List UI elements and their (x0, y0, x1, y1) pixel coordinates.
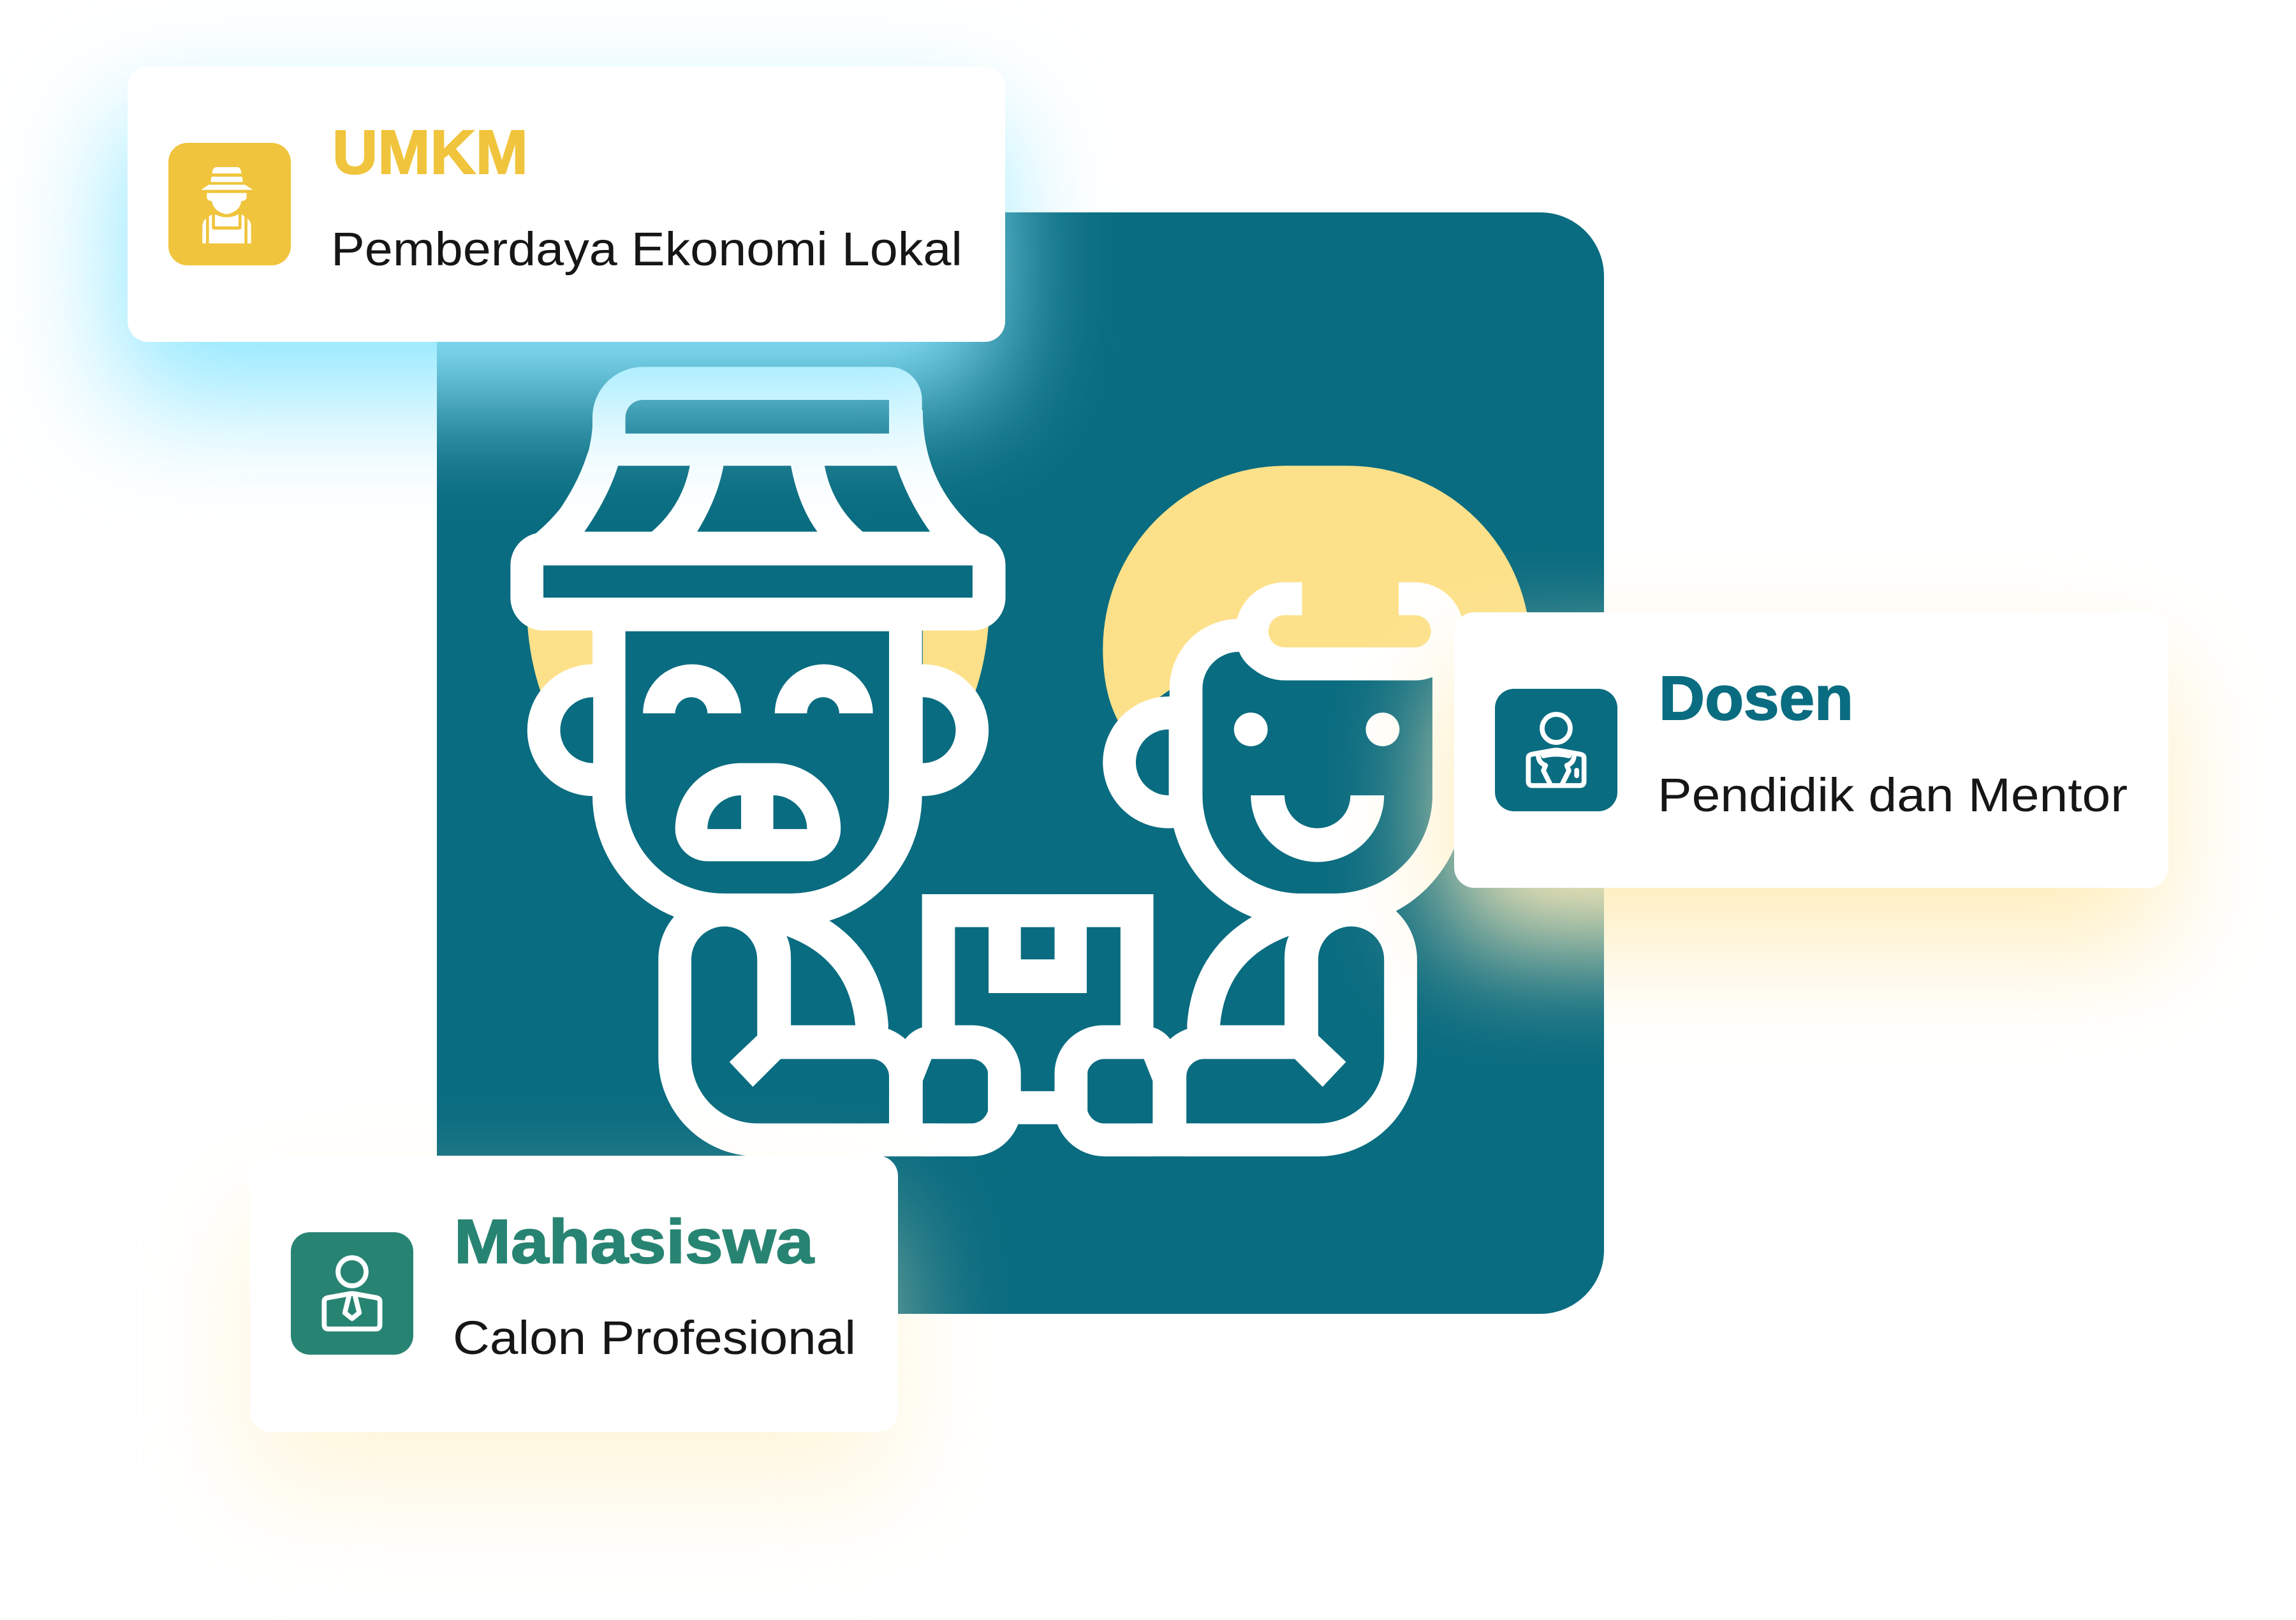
glow: Mahasiswa card (247, 1213, 895, 1489)
text: Mahasiswa (453, 1207, 856, 1364)
lecturer hair (1103, 466, 1531, 725)
seller hair (527, 622, 989, 703)
seller hat silhouette (536, 410, 980, 533)
glow: Dosen card (1448, 670, 2162, 945)
lecturer eyes (1234, 712, 1399, 746)
icon: farmer tile (168, 143, 291, 265)
illustration: seller and lecturer with parcel (527, 400, 1531, 1156)
icon: student tile (291, 1232, 413, 1355)
heading: UMKM: UMKM (332, 117, 528, 187)
seller snout (675, 763, 841, 861)
icon: lecturer tile (1495, 689, 1617, 811)
lecturer smile (1251, 795, 1384, 862)
text: Dosen (1658, 663, 2128, 821)
card: UMKM (128, 66, 1005, 342)
subtitle: Mahasiswa: Calon Profesional (453, 1311, 856, 1364)
lecturer cap (1269, 580, 1431, 647)
panel background (437, 212, 1604, 1314)
subtitle: UMKM: Pemberdaya Ekonomi Lokal (331, 223, 962, 276)
text: UMKM (331, 117, 962, 276)
seller eyes (643, 664, 873, 713)
icon: parcel box (879, 894, 1196, 1156)
lecturer line art: face, ear, arms (1087, 652, 1432, 1123)
card: Mahasiswa (250, 1156, 898, 1432)
glow: UMKM card (118, 124, 996, 399)
icon: seller with hat (527, 400, 989, 1123)
seller line art: hat, face, ears, arms (543, 400, 989, 1123)
heading: Mahasiswa: Mahasiswa (454, 1207, 814, 1276)
card: Dosen (1454, 612, 2168, 888)
subtitle: Dosen: Pendidik dan Mentor (1658, 769, 2128, 821)
icon: lecturer with cap (1087, 466, 1531, 1123)
heading: Dosen: Dosen (1659, 663, 1853, 733)
